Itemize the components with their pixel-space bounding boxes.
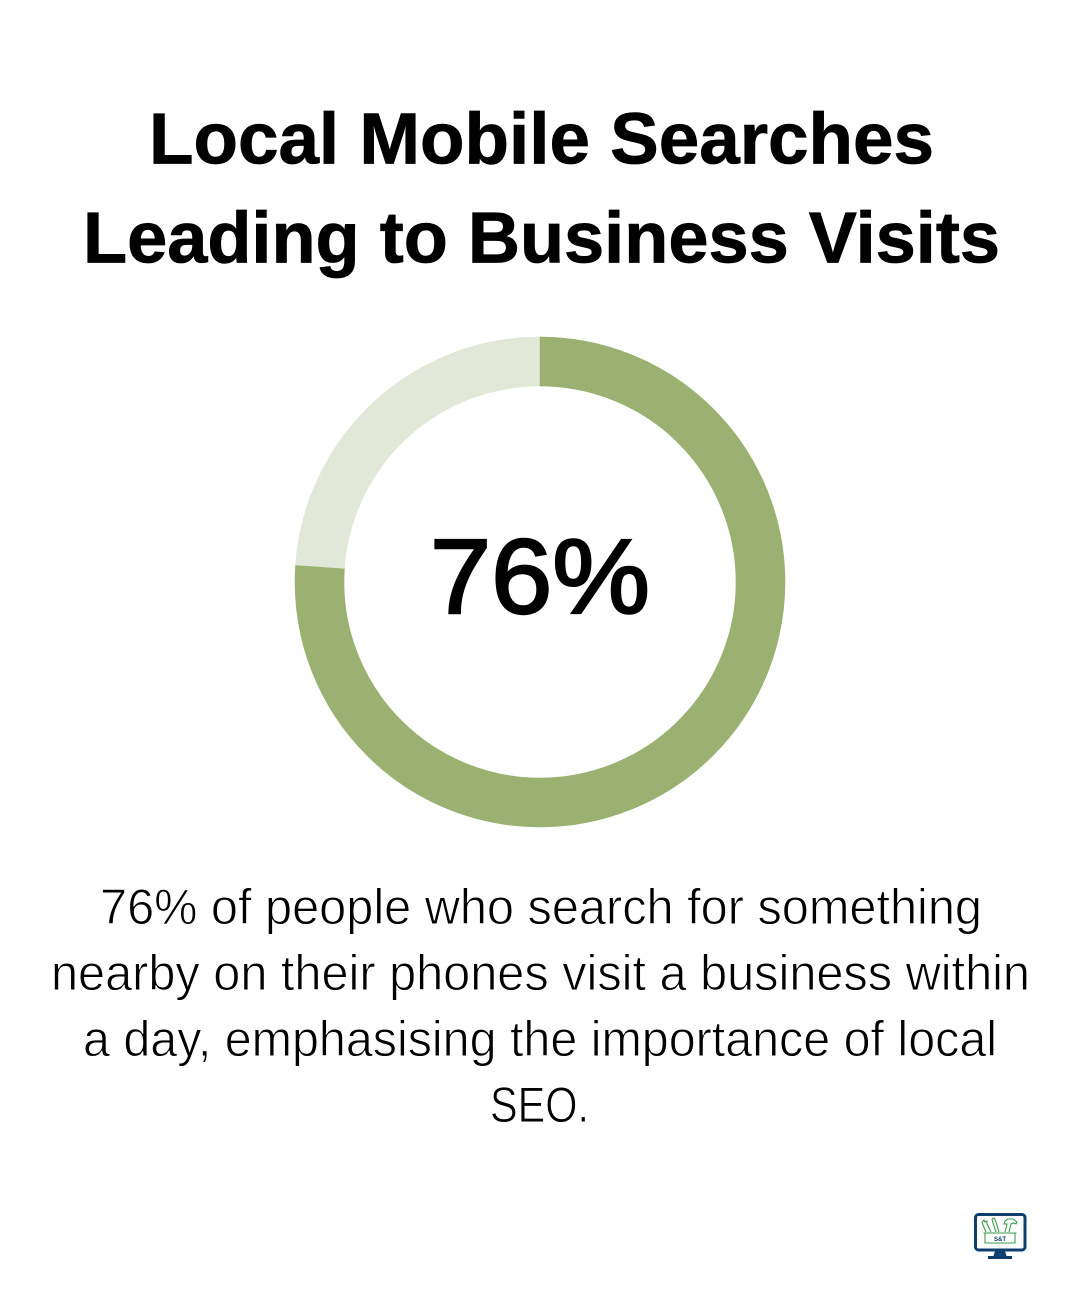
description text: [51, 879, 1030, 1133]
donut value: 76%: [430, 518, 650, 636]
icon: monitor with toolbox logo: [976, 1214, 1025, 1259]
description text: SEO.: [490, 1077, 589, 1133]
description text: nearby on their phones visit a business within: [51, 945, 1030, 1001]
title: Local Mobile Searches: [149, 100, 934, 180]
title: [83, 100, 1000, 278]
description text: a day, emphasising the importance of local: [83, 1011, 997, 1067]
title: Leading to Business Visits: [83, 198, 1000, 278]
description text: 76% of people who search for something: [100, 879, 982, 935]
icon: monitor with toolbox logo: S&T: [994, 1237, 1006, 1243]
donut chart: 76%: [320, 362, 760, 802]
